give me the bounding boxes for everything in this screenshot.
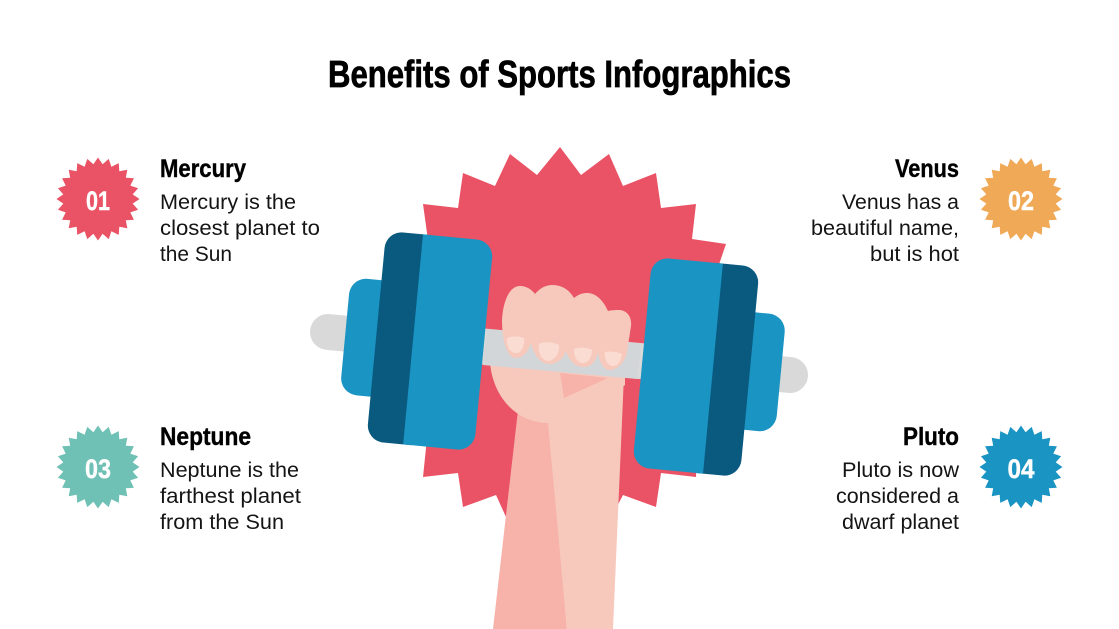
item 01: Mercury [56, 155, 320, 266]
text: Venus description: but is hot [870, 242, 959, 266]
text: Neptune description: from the Sun [160, 510, 284, 534]
arm [493, 375, 624, 629]
heading: Neptune: Neptune [160, 423, 251, 451]
text: Neptune description: farthest planet [160, 484, 301, 508]
text: Venus description: Venus has a [842, 190, 959, 214]
bar across the fist [483, 329, 642, 379]
badge 03 [56, 426, 140, 508]
text: Neptune description: Neptune is the [160, 458, 299, 482]
heading: Mercury: Mercury [160, 155, 246, 183]
badge 01 [56, 158, 140, 240]
badge 03: 03 [85, 454, 111, 484]
text: Mercury description: the Sun [160, 242, 232, 266]
badge 02 [980, 158, 1062, 240]
badge 01: 01 [86, 186, 110, 216]
item 04: Pluto [836, 423, 1062, 534]
badge 04 [980, 426, 1062, 508]
red starburst background [423, 147, 726, 520]
badge 02: 02 [1008, 186, 1034, 216]
text: Neptune description [160, 458, 301, 534]
fingers [502, 285, 631, 370]
text: Mercury description [160, 190, 320, 266]
illustration: fist lifting dumbbell [328, 147, 791, 629]
title: Benefits of Sports Infographics [328, 54, 791, 96]
heading: Pluto: Pluto [903, 423, 959, 451]
text: Pluto description [836, 458, 959, 534]
palm [490, 360, 625, 423]
text: Venus description: beautiful name, [811, 216, 959, 240]
left dumbbell weights [335, 228, 494, 451]
item 03: Neptune [56, 423, 301, 534]
text: Venus description [811, 190, 959, 266]
text: Mercury description: Mercury is the [160, 190, 296, 214]
fingernails [507, 336, 622, 366]
right dumbbell weights [632, 257, 791, 480]
item 02: Venus [811, 155, 1062, 266]
text: Pluto description: considered a [836, 484, 959, 508]
text: Mercury description: closest planet to [160, 216, 320, 240]
heading: Venus: Venus [895, 155, 959, 183]
palm shadow [560, 373, 608, 398]
text: Pluto description: dwarf planet [842, 510, 959, 534]
dumbbell bar [328, 332, 790, 375]
text: Pluto description: Pluto is now [842, 458, 959, 482]
badge 04: 04 [1008, 454, 1034, 484]
